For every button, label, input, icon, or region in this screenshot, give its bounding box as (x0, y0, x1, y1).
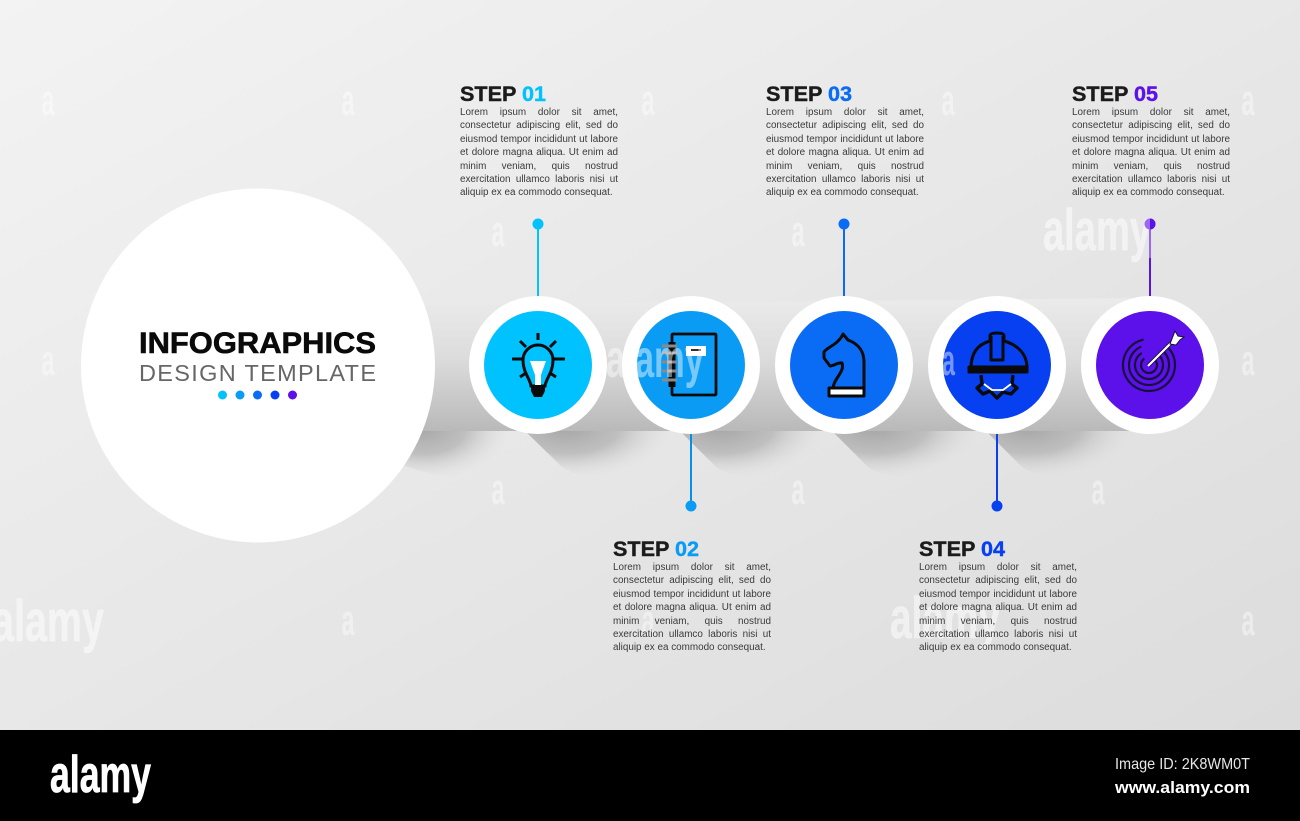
drop shadows below band (385, 428, 1135, 480)
step 03 text: STEP 03 (766, 81, 852, 106)
step 05 text: STEP 05 (1072, 81, 1158, 106)
icon: target and dart (1112, 328, 1186, 402)
node 3: chess knight (775, 296, 913, 434)
step 05 text: consectetur adipiscing elit, sed do (1072, 120, 1230, 131)
step 05 text: Lorem ipsum dolor sit amet, (1072, 107, 1230, 118)
icon: light bulb (512, 333, 565, 397)
step 03 text: aliquip ex ea commodo consequat. (766, 187, 919, 198)
watermark letters: a (792, 207, 805, 256)
node 2: notebook (606, 296, 760, 434)
step 03 text: exercitation ullamco laboris nisi ut (766, 174, 924, 185)
step 01 text: consectetur adipiscing elit, sed do (460, 120, 618, 131)
step 03 text: et dolore magna aliqua. Ut enim ad (766, 147, 924, 158)
step 01 text: minim veniam, quis nostrud (460, 161, 618, 172)
icon: chess knight (824, 334, 864, 396)
title colour dots (218, 390, 297, 400)
connector step 1 (532, 218, 544, 300)
step 01 text: STEP 01 (460, 81, 546, 106)
watermark letters: a (492, 465, 505, 514)
step 02 text: consectetur adipiscing elit, sed do (613, 575, 771, 586)
icon: helmet and gear (969, 333, 1027, 398)
node 5: target and dart (1081, 296, 1219, 434)
step 02 text: STEP 02 (613, 536, 699, 561)
step 02 text: aliquip ex ea commodo consequat. (613, 642, 766, 653)
step 02 text: minim veniam, quis nostrud (613, 616, 771, 627)
watermark letters: a (1242, 336, 1255, 385)
watermark words: alamy (1043, 198, 1151, 263)
step 05 text: eiusmod tempor incididunt ut labore (1072, 134, 1230, 145)
step 04 text: et dolore magna aliqua. Ut enim ad (919, 602, 1077, 613)
step 04 text: minim veniam, quis nostrud (919, 616, 1077, 627)
step 02 text: exercitation ullamco laboris nisi ut (613, 629, 771, 640)
step 01 text (460, 81, 618, 198)
website: www.alamy.com (1114, 778, 1250, 797)
step 01 text: eiusmod tempor incididunt ut labore (460, 134, 618, 145)
step 03 text: minim veniam, quis nostrud (766, 161, 924, 172)
step 02 text: eiusmod tempor incididunt ut labore (613, 589, 771, 600)
step 03 text: eiusmod tempor incididunt ut labore (766, 134, 924, 145)
node 4: helmet and gear (928, 296, 1066, 434)
step 01 text: aliquip ex ea commodo consequat. (460, 187, 613, 198)
watermark letters: a (1092, 465, 1105, 514)
step 04 text: consectetur adipiscing elit, sed do (919, 575, 1077, 586)
connector step 5 (1144, 218, 1156, 300)
step 04 text: Lorem ipsum dolor sit amet, (919, 562, 1077, 573)
step 03 text: Lorem ipsum dolor sit amet, (766, 107, 924, 118)
watermark letters: a (42, 336, 55, 385)
watermark words: alamy (890, 586, 1000, 651)
title: DESIGN TEMPLATE (139, 360, 376, 386)
watermark fragment: a (942, 336, 955, 385)
watermark letters: a (1242, 596, 1255, 645)
step 04 text: STEP 04 (919, 536, 1005, 561)
connector step 4 (992, 430, 1002, 512)
watermark letters (42, 76, 1255, 645)
watermark letters: a (942, 76, 955, 125)
watermark letters: a (1242, 76, 1255, 125)
watermark letters: a (792, 465, 805, 514)
watermark letters: a (342, 596, 355, 645)
step 02 text: Lorem ipsum dolor sit amet, (613, 562, 771, 573)
step 02 text: et dolore magna aliqua. Ut enim ad (613, 602, 771, 613)
step 03 text: consectetur adipiscing elit, sed do (766, 120, 924, 131)
connector step 2 (686, 430, 696, 512)
step 03 text (766, 81, 924, 198)
step 05 text: aliquip ex ea commodo consequat. (1072, 187, 1225, 198)
watermark words (0, 198, 1151, 654)
footer bar (0, 730, 1300, 821)
watermark letters: a (492, 207, 505, 256)
step 04 text (919, 536, 1077, 653)
title (139, 327, 376, 386)
watermark letters: a (642, 596, 655, 645)
icon: notebook (662, 334, 716, 395)
step 02 text (613, 536, 771, 653)
step 05 text: exercitation ullamco laboris nisi ut (1072, 174, 1230, 185)
connector step 3 (838, 218, 850, 300)
step 01 text: et dolore magna aliqua. Ut enim ad (460, 147, 618, 158)
watermark letters: a (342, 76, 355, 125)
main white circle (81, 188, 435, 542)
node 1: light bulb (469, 296, 607, 434)
step 05 text: minim veniam, quis nostrud (1072, 161, 1230, 172)
step 05 text (1072, 81, 1230, 198)
connecting band (420, 298, 1150, 431)
step 05 text: et dolore magna aliqua. Ut enim ad (1072, 147, 1230, 158)
watermark letters: a (42, 76, 55, 125)
watermark letters: a (642, 76, 655, 125)
watermark over notebook: alamy (606, 329, 704, 389)
title: INFOGRAPHICS (139, 327, 376, 360)
image id: Image ID: 2K8WM0T (1115, 756, 1250, 773)
step 04 text: exercitation ullamco laboris nisi ut (919, 629, 1077, 640)
step 01 text: Lorem ipsum dolor sit amet, (460, 107, 618, 118)
step 01 text: exercitation ullamco laboris nisi ut (460, 174, 618, 185)
step 04 text: aliquip ex ea commodo consequat. (919, 642, 1072, 653)
step 04 text: eiusmod tempor incididunt ut labore (919, 589, 1077, 600)
footer logo: alamy (50, 746, 151, 804)
